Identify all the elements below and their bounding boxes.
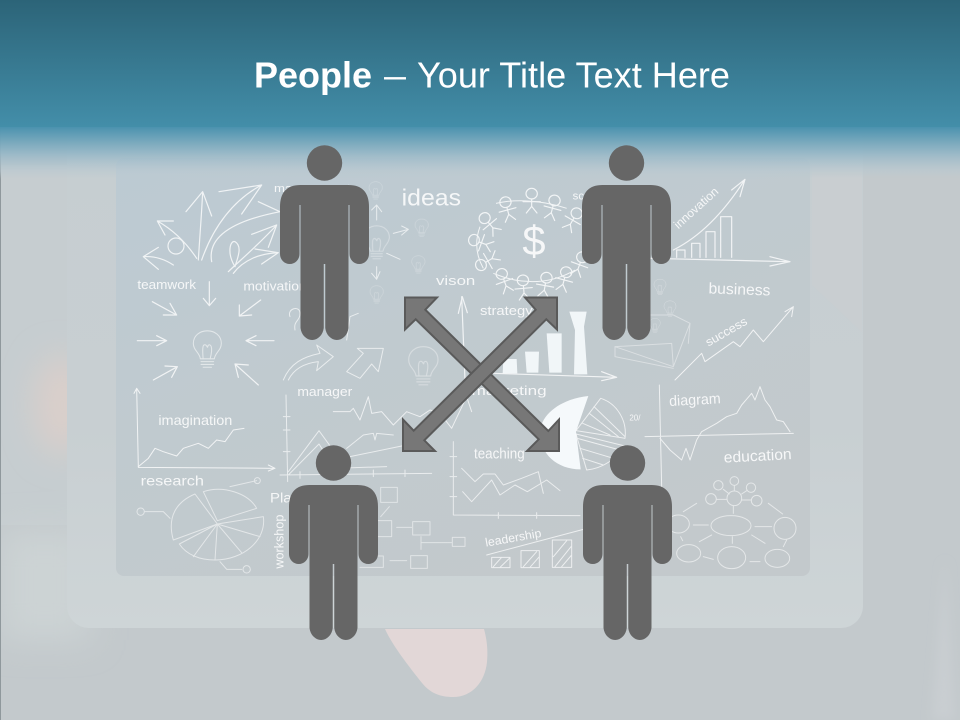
label: leadership: leadership xyxy=(484,526,543,550)
label: management: management xyxy=(274,183,352,195)
title xyxy=(254,54,730,96)
blurred background tones xyxy=(0,355,90,640)
label: motivation: motivation xyxy=(243,279,307,294)
network diagram xyxy=(667,477,796,569)
leadership chart xyxy=(487,529,583,568)
hatched pie slices xyxy=(576,398,625,470)
arrows around idea bulb xyxy=(137,282,274,385)
icon: small faint bulbs xyxy=(364,182,438,385)
faint box with bulbs xyxy=(615,279,690,368)
arrow: top-right to bottom-left xyxy=(403,298,557,451)
doodles: upper left quadrant xyxy=(137,182,475,385)
label: ideas: ideas xyxy=(402,184,461,210)
label: sc: sc xyxy=(573,190,584,202)
label: imagination: imagination xyxy=(158,412,232,428)
label: plan: Plan xyxy=(270,490,300,506)
tablet screen xyxy=(116,158,810,576)
imagination chart xyxy=(134,388,275,471)
label: marketing: marketing xyxy=(472,383,547,398)
lower right light wedge xyxy=(932,560,955,720)
icon: person bottom right xyxy=(583,445,672,640)
vertical arrow xyxy=(458,297,467,380)
finger behind tablet xyxy=(385,629,487,697)
arrow: top-left to bottom-right xyxy=(405,298,559,451)
label: workshop: workshop xyxy=(272,515,286,570)
innovation growth chart xyxy=(650,179,790,266)
label: teamwork: teamwork xyxy=(137,277,197,292)
doodles: upper right quadrant xyxy=(466,179,793,381)
tablet right reflection xyxy=(812,165,862,332)
label: success: success xyxy=(703,314,750,349)
icon: person bottom left xyxy=(289,445,378,640)
left edge line xyxy=(0,127,1,720)
teaching chart xyxy=(450,442,580,518)
bar chart axis xyxy=(493,372,617,381)
arrow burst xyxy=(143,185,280,273)
jagged signal line xyxy=(333,397,472,428)
manager arrows and question mark xyxy=(283,205,408,380)
success line xyxy=(675,307,793,380)
header band xyxy=(0,0,960,127)
icon: idea bulb xyxy=(193,331,221,367)
title: Your Title Text Here xyxy=(417,54,730,96)
pie chart outline xyxy=(137,478,264,573)
title: – xyxy=(384,54,406,96)
left side panel tone xyxy=(0,165,100,525)
label: research: research xyxy=(141,473,204,489)
label: teaching: teaching xyxy=(474,446,525,462)
label: dollar sign: $ xyxy=(522,217,546,264)
title: People xyxy=(254,54,372,96)
label: education: education xyxy=(723,446,792,467)
label: vison: vison xyxy=(436,273,475,288)
manager chart xyxy=(280,395,432,482)
label: manager: manager xyxy=(297,384,353,399)
label: business: business xyxy=(708,280,771,300)
people ring xyxy=(466,188,592,300)
label: strategy: strategy xyxy=(480,304,533,318)
white bar chart xyxy=(503,312,587,374)
label: diagram: diagram xyxy=(669,391,721,410)
icon: person top right xyxy=(582,145,671,340)
label: percent note: 20/ xyxy=(629,414,641,423)
doodles: lower left quadrant xyxy=(134,384,472,573)
white pie slice xyxy=(540,396,588,469)
label: innovation: innovation xyxy=(671,184,721,232)
tablet body xyxy=(67,120,863,628)
flow chart boxes xyxy=(360,487,465,568)
header fade xyxy=(0,127,960,179)
icon: person top left xyxy=(280,145,369,340)
doodles: lower right quadrant xyxy=(450,383,796,569)
diagram chart xyxy=(645,385,793,487)
